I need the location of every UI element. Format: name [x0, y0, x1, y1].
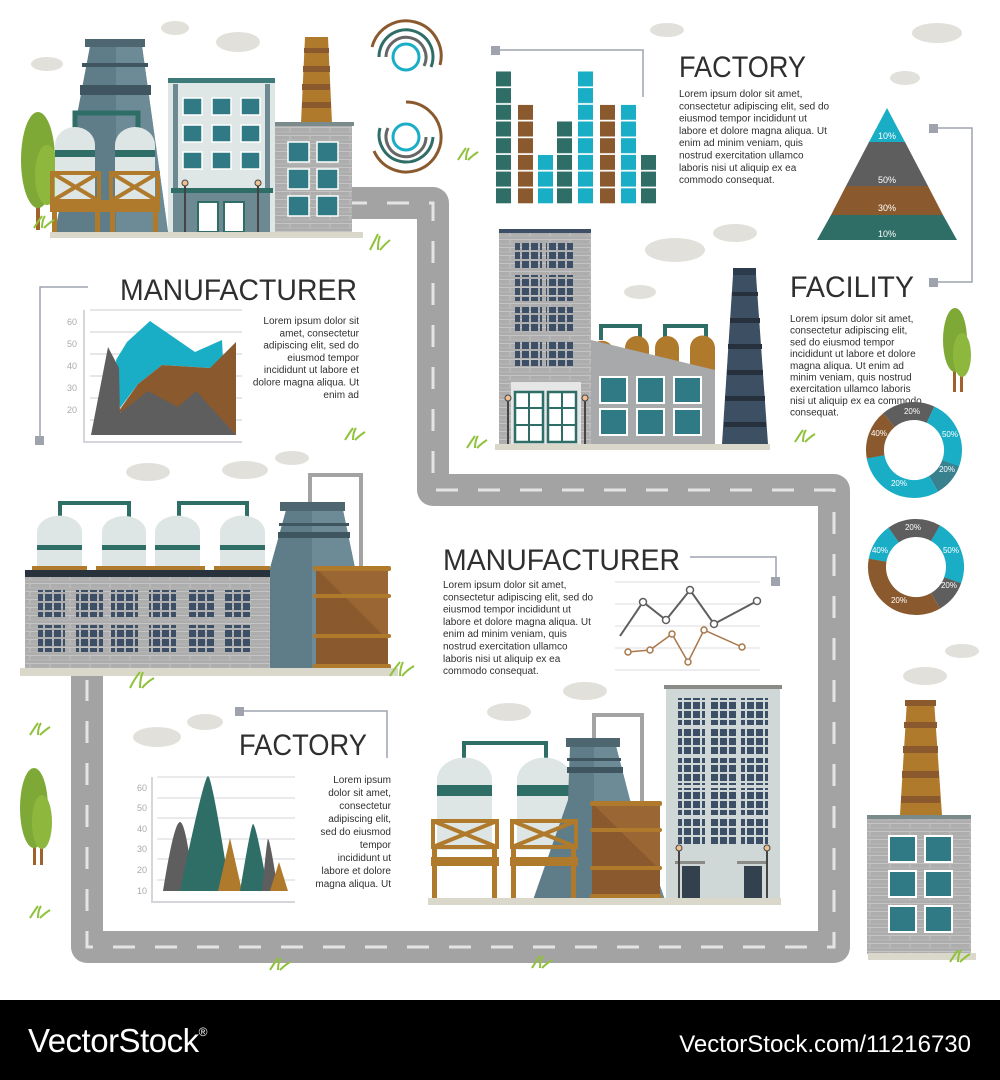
- connector: top factory: [491, 46, 643, 97]
- donut chart 2: 40%: [872, 546, 888, 555]
- text: factory bottom: tempor: [360, 840, 392, 851]
- connector: factory bottom: [235, 707, 387, 758]
- building group: bottom center: [428, 685, 782, 905]
- text: manufacturer middle: labore et dolore magna aliqua. Ut: [443, 617, 591, 628]
- area chart: 30: [67, 383, 77, 393]
- peak chart: 60: [137, 783, 147, 793]
- connector: pyramid/facility: [929, 124, 972, 287]
- text: manufacturer left: dolore magna aliqua. Ut: [253, 378, 359, 388]
- text: manufacturer left: incididunt ut labore et: [264, 365, 359, 376]
- office: [168, 80, 275, 232]
- pyramid chart: 10%: [878, 131, 896, 141]
- heading: MANUFACTURER middle: MANUFACTURER: [443, 544, 680, 577]
- heading: FACTORY top: FACTORY: [679, 51, 806, 84]
- text: factory bottom: Lorem ipsum: [333, 775, 391, 786]
- text: manufacturer middle: nostrud exercitation ullamco: [443, 642, 568, 652]
- brick building: [275, 126, 352, 232]
- icon: concentric spirals: [372, 21, 441, 172]
- text: factory top: Lorem ipsum dolor sit amet,: [679, 89, 802, 100]
- bar chart: squares: [496, 71, 656, 205]
- donut chart 2: 50%: [943, 546, 959, 555]
- line chart: [615, 582, 760, 670]
- peak chart: [137, 776, 295, 902]
- donut chart 1: 40%: [871, 429, 887, 438]
- text: manufacturer left: amet, consectetur: [280, 328, 360, 339]
- tree: [36, 175, 40, 230]
- text: facility: Lorem ipsum dolor sit amet,: [790, 314, 913, 325]
- building group: left factory: [20, 475, 398, 676]
- chimney: [301, 37, 332, 123]
- donut chart 1: 50%: [942, 430, 958, 439]
- footer bar: VectorStock: [28, 1022, 199, 1059]
- text: factory top: enim ad minim veniam, quis: [679, 138, 803, 149]
- building group: bottom right: [867, 700, 976, 960]
- footer bar: VectorStock.com/11216730: [679, 1031, 971, 1058]
- donut chart 1: 20%: [904, 407, 920, 416]
- text: factory bottom: incididunt ut: [338, 853, 391, 864]
- peak chart: 30: [137, 844, 147, 854]
- area chart: 40: [67, 361, 77, 371]
- text: facility: sed do eiusmod tempor: [790, 337, 895, 348]
- peak chart: 40: [137, 824, 147, 834]
- text: factory bottom: dolor sit amet,: [328, 788, 391, 799]
- donut chart 2: [862, 513, 970, 621]
- text: factory top: laboris nisi ut aliquip ex ea: [679, 163, 797, 174]
- text: facility: consectetur adipiscing elit,: [790, 326, 907, 337]
- text: factory bottom: magna aliqua. Ut: [315, 879, 391, 890]
- grass tufts: [30, 148, 970, 970]
- text: manufacturer middle: commodo consequat.: [443, 666, 539, 677]
- text: facility: consequat.: [790, 408, 839, 419]
- text: facility: minim veniam, quis nostrud: [790, 372, 912, 384]
- text: manufacturer left: Lorem ipsum dolor sit: [263, 316, 359, 327]
- text: manufacturer left: adipiscing elit, sed do: [263, 341, 359, 352]
- text: facility: magna aliqua. Ut enim ad: [790, 361, 904, 372]
- text: factory top: nostrud exercitation ullamco: [679, 150, 804, 162]
- donut chart 1: 20%: [939, 465, 955, 474]
- cooling tower: [55, 46, 168, 232]
- area chart: [67, 310, 242, 442]
- heading: FACTORY bottom: FACTORY: [239, 729, 367, 762]
- pyramid chart: 10%: [878, 229, 896, 239]
- pyramid chart: 50%: [878, 175, 896, 185]
- text: manufacturer middle: eiusmod tempor incididunt ut: [443, 605, 571, 616]
- text: factory top: commodo consequat.: [679, 175, 775, 186]
- donut chart 2: 20%: [891, 596, 907, 605]
- text: factory top: labore et dolore magna aliqua. Ut: [679, 126, 827, 137]
- text: manufacturer middle: laboris nisi ut aliquip ex ea: [443, 654, 561, 665]
- road: [87, 203, 834, 947]
- donut chart 1: [859, 395, 969, 505]
- text: factory bottom: consectetur: [339, 801, 392, 812]
- connector: manufacturer middle: [690, 557, 780, 586]
- text: manufacturer middle: Lorem ipsum dolor sit amet,: [443, 580, 566, 591]
- area chart: 60: [67, 317, 77, 327]
- area chart: 50: [67, 339, 77, 349]
- text: factory top: eiusmod tempor incididunt ut: [679, 114, 807, 125]
- text: facility: exercitation ullamco laboris: [790, 384, 911, 395]
- pyramid chart: [817, 108, 957, 240]
- icon: tree right: [943, 308, 971, 392]
- text: manufacturer left: eiusmod tempor: [287, 353, 360, 364]
- peak chart: 20: [137, 865, 147, 875]
- text: factory bottom: sed do eiusmod: [320, 827, 391, 838]
- icon: tree left bottom: [20, 768, 52, 865]
- heading: FACILITY: FACILITY: [790, 271, 914, 304]
- text: factory bottom: labore et dolore: [322, 866, 391, 877]
- text: facility: nisi ut aliquip ex ea commodo: [790, 396, 922, 407]
- heading: MANUFACTURER left: MANUFACTURER: [120, 274, 357, 307]
- donut chart 2: 20%: [905, 523, 921, 532]
- text: factory bottom: adipiscing elit,: [328, 814, 391, 825]
- text: facility: incididunt ut labore et dolore: [790, 349, 916, 360]
- building group: top left: [21, 37, 363, 238]
- text: manufacturer middle: enim ad minim veniam, quis: [443, 629, 567, 640]
- footer bar: [0, 1000, 1000, 1080]
- peak chart: 10: [137, 886, 147, 896]
- clouds: [31, 21, 979, 747]
- donut chart 1: 20%: [891, 479, 907, 488]
- peak chart: 50: [137, 803, 147, 813]
- text: manufacturer left: enim ad: [323, 390, 359, 401]
- text: factory top: consectetur adipiscing elit, sed do: [679, 101, 830, 112]
- text: manufacturer middle: consectetur adipiscing elit, sed do: [443, 592, 594, 603]
- donut chart 2: 20%: [941, 581, 957, 590]
- footer bar: ®: [199, 1025, 208, 1039]
- connector: manufacturer left: [35, 287, 88, 445]
- building group: right middle: [495, 229, 770, 450]
- pyramid chart: 30%: [878, 203, 896, 213]
- area chart: 20: [67, 405, 77, 415]
